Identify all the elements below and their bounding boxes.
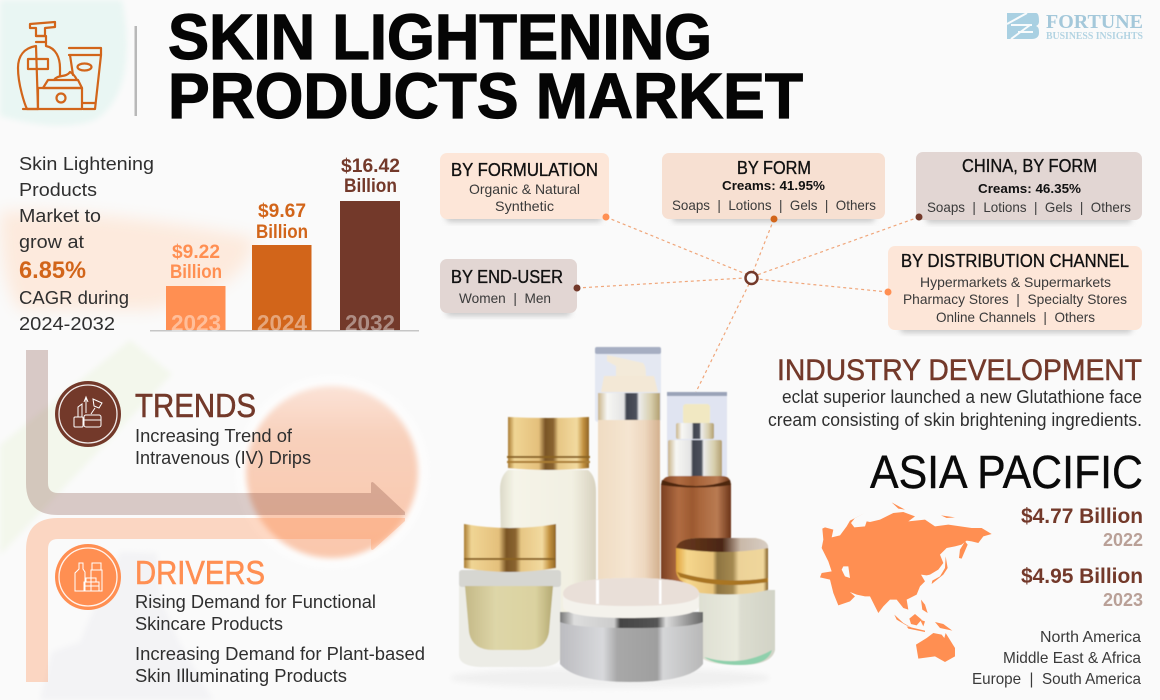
text: other regions: Middle East & Africa <box>1003 650 1141 667</box>
bar chart: market size: 2023 <box>171 310 221 336</box>
text: market growth summary: Market to <box>19 206 101 226</box>
panel: by distribution channel: Hypermarkets & Supermarkets <box>920 274 1111 290</box>
text: other regions: North America <box>1040 629 1141 646</box>
panel: by form: BY FORM <box>737 158 811 178</box>
icon: trends badge <box>55 381 121 447</box>
panel: by end-user <box>440 259 577 316</box>
heading: industry development: INDUSTRY DEVELOPMENT <box>777 354 1142 387</box>
text: drivers body: Skin Illuminating Products <box>135 666 347 686</box>
text: trends body <box>135 426 311 468</box>
arrow: drivers <box>26 518 405 682</box>
panel: by formulation <box>440 153 609 222</box>
text: drivers body: Rising Demand for Functional <box>135 592 376 612</box>
stats: Asia Pacific values: 2022 <box>1103 530 1143 550</box>
title: SKIN LIGHTENING <box>168 1 712 73</box>
bar chart: market size: $9.22 <box>172 242 220 263</box>
text: other regions <box>972 629 1141 688</box>
text: industry development body: eclat superior launched a new Glutathione face <box>782 387 1142 407</box>
connector lines <box>577 217 919 392</box>
text: drivers body <box>135 592 425 686</box>
heading: drivers: DRIVERS <box>135 554 265 591</box>
bar chart: market size: $9.67 <box>258 201 306 222</box>
panel: by formulation: Synthetic <box>495 198 554 214</box>
text: industry development body <box>768 387 1142 430</box>
panel: by distribution channel: Pharmacy Stores | Specialty Stores <box>903 291 1127 307</box>
panel: by formulation: Organic & Natural <box>469 181 580 197</box>
logo: Fortune Business Insights: FORTUNE <box>1046 11 1143 33</box>
bar chart: market size: Billion <box>256 222 308 243</box>
text: market growth summary: Skin Lightening <box>19 154 154 174</box>
stats: Asia Pacific values: $4.95 Billion <box>1021 565 1143 588</box>
panel: by form <box>662 153 885 222</box>
text: market growth summary: grow at <box>19 232 84 252</box>
icon: skincare products <box>18 22 101 109</box>
panel: china, by form: Creams: 46.35% <box>978 181 1081 196</box>
text: drivers body: Skincare Products <box>135 614 283 634</box>
stats: Asia Pacific values: $4.77 Billion <box>1021 505 1143 528</box>
arrow: trends <box>26 350 405 515</box>
panel: by form: Soaps | Lotions | Gels | Others <box>672 197 876 213</box>
connector dots and hub <box>574 214 922 296</box>
panel: by distribution channel <box>888 246 1142 333</box>
panel: china, by form <box>916 152 1142 223</box>
right jar <box>676 538 775 665</box>
panel: by end-user: Women | Men <box>459 290 551 306</box>
bar chart: market size: $16.42 <box>341 156 400 177</box>
text: trends body: Increasing Trend of <box>135 426 293 446</box>
icon: drivers badge <box>55 544 121 610</box>
text: industry development body: cream consisting of skin brightening ingredients. <box>768 410 1142 430</box>
divider: header <box>134 26 137 116</box>
bar chart: market size: Billion <box>344 176 397 197</box>
panel: by formulation: BY FORMULATION <box>451 160 598 180</box>
panel: china, by form: Soaps | Lotions | Gels | Others <box>927 199 1131 215</box>
text: market growth summary: Products <box>19 180 97 200</box>
amber pump bottle <box>661 392 731 590</box>
panel: by form: Creams: 41.95% <box>722 178 825 193</box>
bar chart: market size <box>150 156 419 336</box>
logo: Fortune Business Insights <box>1007 11 1143 42</box>
logo: Fortune Business Insights: BUSINESS INSIGHTS <box>1046 31 1143 42</box>
bar chart: market size: 2024 <box>257 310 307 336</box>
heading: asia pacific: ASIA PACIFIC <box>870 446 1143 498</box>
text: drivers body: Increasing Demand for Plant-based <box>135 644 425 664</box>
bar chart: market size: 2032 <box>345 310 395 336</box>
panel: by end-user: BY END-USER <box>451 267 563 287</box>
panel: by distribution channel: BY DISTRIBUTION CHANNEL <box>901 251 1129 271</box>
text: market growth summary: 6.85% <box>19 257 86 284</box>
front grey jar <box>560 578 703 682</box>
stats: Asia Pacific values: 2023 <box>1103 590 1143 610</box>
map: Asia Pacific <box>820 502 992 662</box>
back left bottle <box>500 417 596 640</box>
panel: china, by form: CHINA, BY FORM <box>962 156 1097 176</box>
title: PRODUCTS MARKET <box>168 60 803 132</box>
text: trends body: Intravenous (IV) Drips <box>135 448 311 468</box>
panel: by distribution channel: Online Channels | Others <box>936 309 1095 325</box>
text: market growth summary: CAGR during <box>19 288 129 308</box>
left glass jar <box>459 524 561 667</box>
illustration: cosmetic bottles and jars <box>450 347 775 688</box>
title <box>168 1 803 132</box>
text: other regions: Europe | South America <box>972 671 1141 688</box>
heading: trends: TRENDS <box>135 387 256 424</box>
stats: Asia Pacific values <box>1021 505 1143 610</box>
text: market growth summary: 2024-2032 <box>19 314 115 334</box>
text: market growth summary <box>19 154 154 334</box>
tall pump bottle <box>595 347 661 590</box>
bar chart: market size: Billion <box>170 262 222 283</box>
